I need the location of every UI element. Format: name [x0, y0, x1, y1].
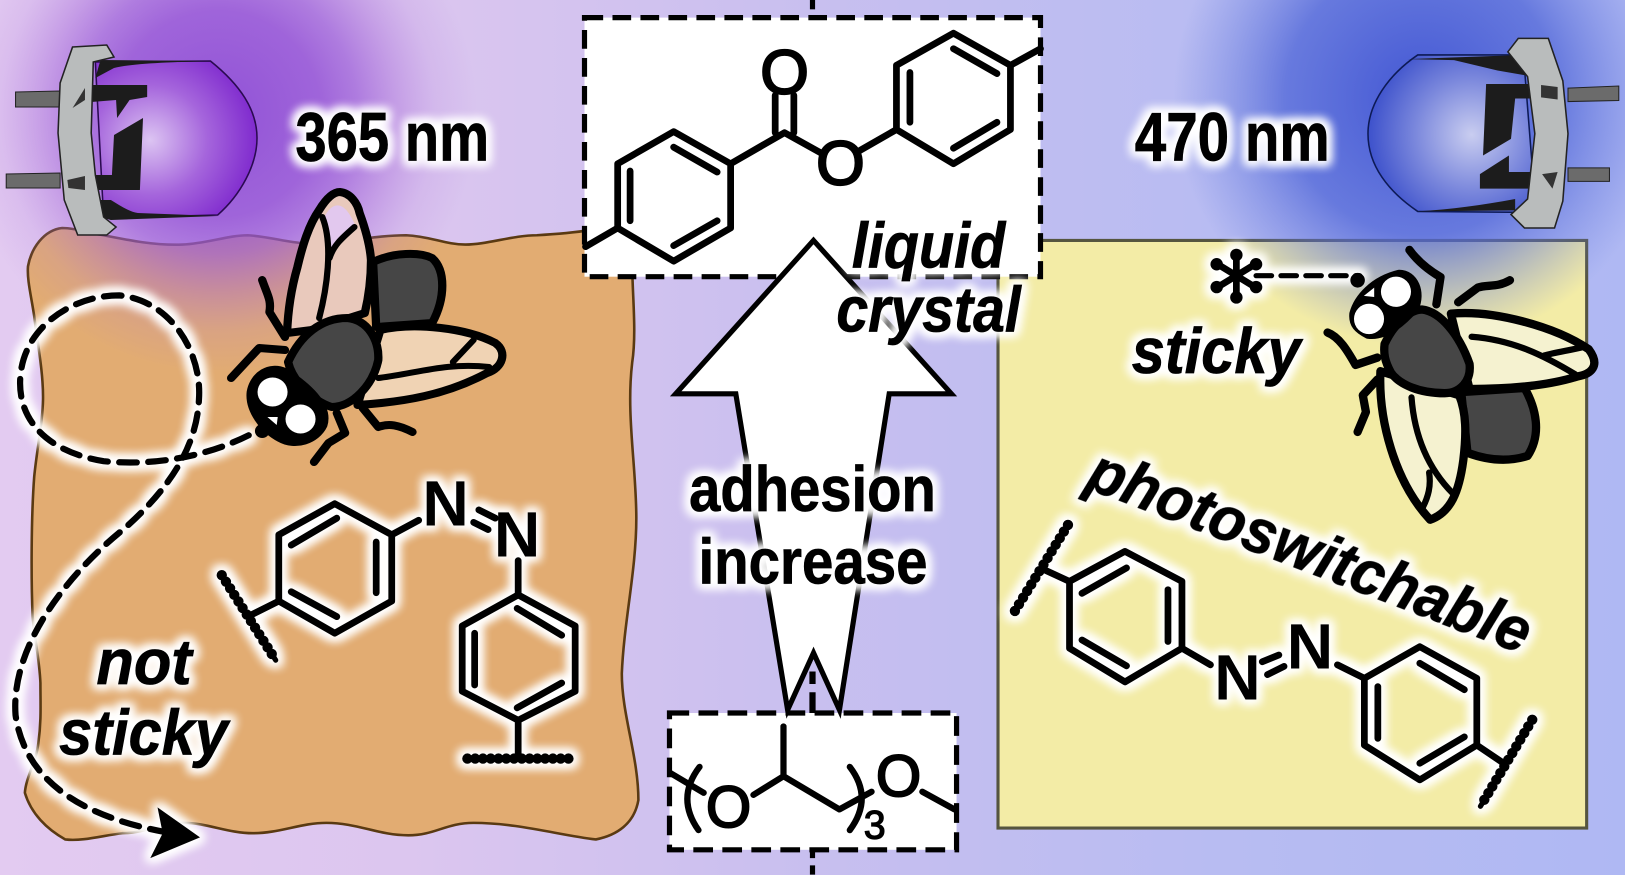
panel: yellow sticky surface [998, 240, 1587, 828]
box: oligo ether: O [706, 775, 751, 840]
light glow: blue [1171, 0, 1625, 352]
flight path: dashed loop [15, 295, 249, 858]
right wing [1451, 313, 1594, 389]
asterisk tips [1210, 249, 1262, 304]
label: liquid crystal: liquid [852, 209, 1007, 281]
arrow: adhesion increase [676, 240, 951, 710]
box: oligo ether: 3 [864, 803, 886, 847]
light glow: violet [0, 0, 482, 375]
icon: fly on orange surface [231, 192, 502, 462]
antenna bump [259, 428, 265, 434]
thorax [1384, 310, 1470, 393]
label: not sticky: sticky [59, 696, 231, 768]
eyes [1354, 277, 1411, 334]
abdomen [373, 254, 442, 327]
molecule: trans azobenzene [1015, 525, 1532, 806]
structure: ester with two rings [586, 33, 1040, 261]
label: photoswitchable: photoswitchable [1077, 435, 1541, 667]
icon: violet LED [6, 45, 257, 235]
panel: orange non-sticky surface [25, 228, 638, 840]
molecule: cis azobenzene [222, 467, 575, 759]
upper wing veins [319, 217, 354, 318]
side wing [358, 326, 502, 405]
legs [1328, 250, 1510, 432]
label: liquid crystal [836, 209, 1022, 346]
label: adhesion increase [689, 453, 936, 597]
legs [231, 280, 412, 462]
wavy attachment bonds [1015, 525, 1532, 806]
heading: 365 nm: 365 nm [295, 100, 489, 176]
upper wing [287, 192, 371, 333]
wavy attachment bonds [222, 575, 570, 759]
label: not sticky [59, 626, 231, 768]
box: oligo ether: O [876, 744, 921, 809]
dashed connector inside arrow notch [810, 672, 816, 713]
arrowhead [150, 807, 200, 858]
dashed stub: top [810, 0, 815, 9]
head [251, 370, 324, 442]
thorax [288, 318, 378, 407]
dashed stub: bottom [810, 850, 815, 875]
icon: fly on yellow surface [1328, 250, 1594, 520]
icon: blue LED [1368, 38, 1619, 228]
lower wing veins [1412, 397, 1453, 507]
right wing veins [1472, 337, 1583, 374]
asterisk and link [1210, 249, 1360, 304]
eyes [258, 378, 316, 434]
abdomen [1461, 388, 1536, 460]
box: liquid crystal monomer [585, 18, 1040, 277]
molecule: cis azobenzene: N [422, 467, 469, 539]
molecule: trans azobenzene: N [1287, 610, 1333, 682]
head [1353, 274, 1417, 335]
label: adhesion increase: adhesion [689, 453, 936, 525]
box: liquid crystal monomer: O [760, 38, 809, 107]
label: liquid crystal: crystal [836, 274, 1022, 346]
side wing veins [378, 340, 489, 378]
heading: 470 nm: 470 nm [1135, 100, 1330, 176]
label: sticky: sticky [1132, 315, 1304, 387]
molecule: cis azobenzene: N [494, 499, 540, 571]
antenna bump [1355, 277, 1361, 283]
box: oligo ether [669, 713, 957, 850]
lower wing [1380, 371, 1465, 520]
upper wing tip tint [324, 205, 355, 250]
structure: glycol chain [671, 726, 954, 830]
label: adhesion increase: increase [699, 525, 928, 597]
box: liquid crystal monomer: O [816, 129, 865, 198]
label: not sticky: not [96, 626, 194, 698]
molecule: trans azobenzene: N [1214, 642, 1261, 714]
